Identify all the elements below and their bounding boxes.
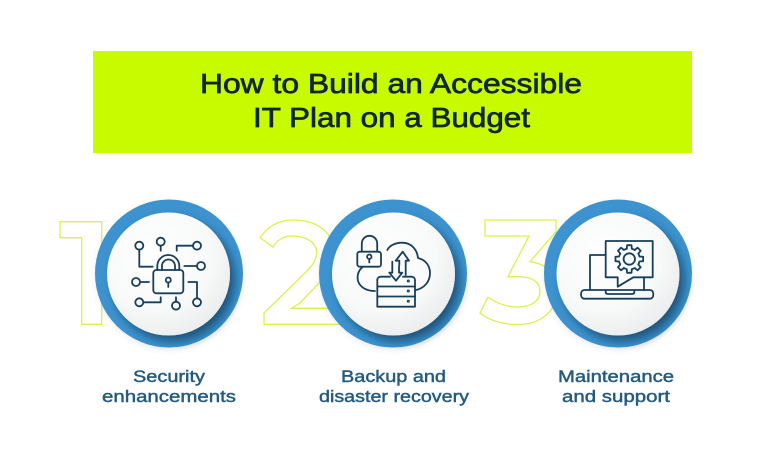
label 1: enhancements xyxy=(102,387,236,406)
label 2 xyxy=(319,367,470,406)
label 3: and support xyxy=(562,387,670,406)
icon: lock, cloud and server xyxy=(357,236,430,307)
label 2: disaster recovery xyxy=(319,387,470,406)
step 3: maintenance and support xyxy=(544,200,692,406)
label 3: Maintenance xyxy=(558,367,674,386)
badge ring 2 xyxy=(319,200,467,348)
badge face 2 xyxy=(332,212,455,336)
badge ring 1 xyxy=(95,200,243,348)
label 1 xyxy=(102,367,236,406)
label 2: Backup and xyxy=(341,367,446,386)
icon: padlock with circuit nodes xyxy=(132,238,205,310)
step 1: security enhancements xyxy=(95,200,243,406)
icon: laptop with gear speech bubble xyxy=(581,241,653,299)
badge face 3 xyxy=(556,212,680,336)
title banner xyxy=(93,51,692,153)
title xyxy=(200,68,582,133)
title: IT Plan on a Budget xyxy=(253,102,530,133)
outlined numeral 2 xyxy=(260,220,340,324)
label 3 xyxy=(558,367,674,406)
badge face 1 xyxy=(107,212,230,336)
badge ring 3 xyxy=(544,200,692,348)
outlined numeral 1 xyxy=(60,222,102,324)
label 1: Security xyxy=(133,367,206,386)
step 2: backup and disaster recovery xyxy=(319,200,470,406)
outlined numeral 3 xyxy=(480,220,557,324)
title: How to Build an Accessible xyxy=(200,68,582,99)
